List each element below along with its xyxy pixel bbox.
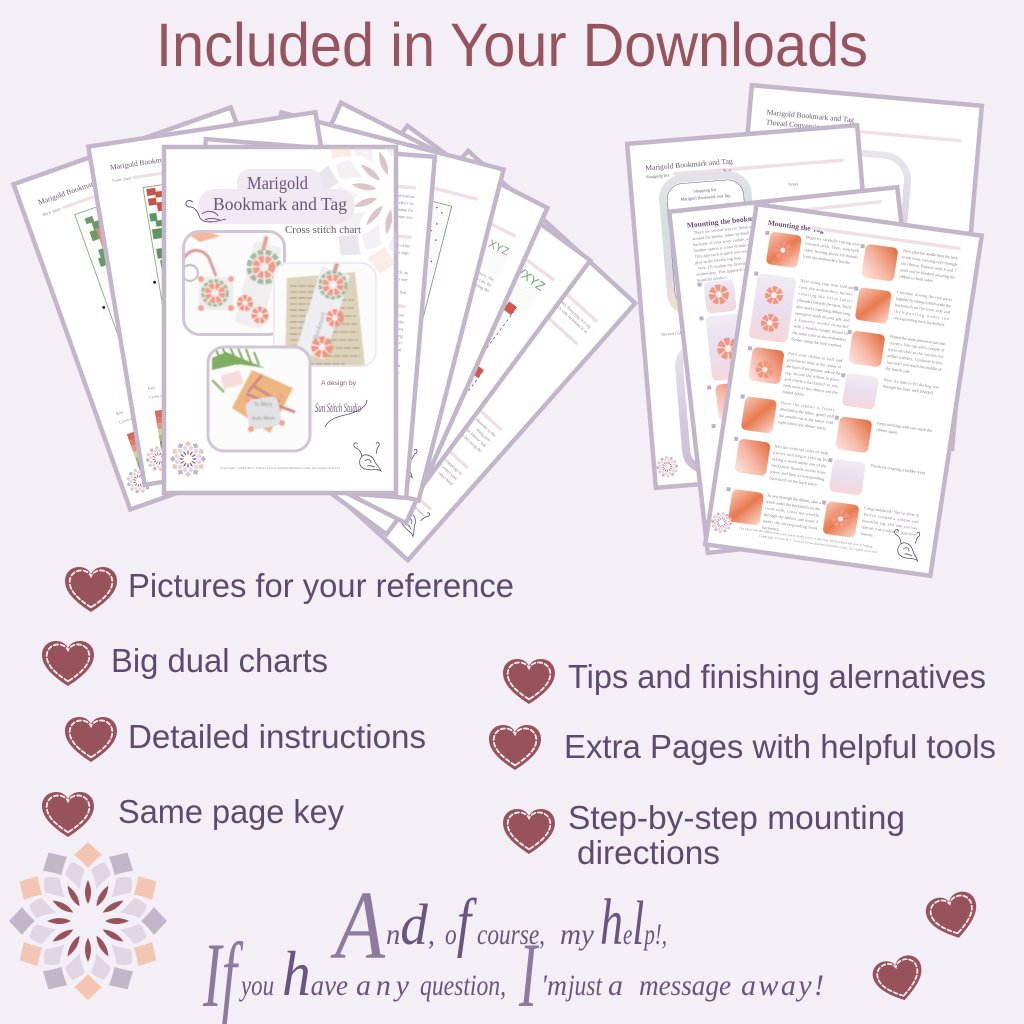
list item: extra pages <box>489 725 996 770</box>
tag page left column text: the same color as the embroidery <box>792 330 848 342</box>
closing script message: have <box>282 938 348 1009</box>
page: cover <box>162 144 398 496</box>
page: alphabet chart two: letters can, the <box>468 272 493 289</box>
list item: detailed instructions: Detailed instructions <box>128 718 426 755</box>
closing script message: 'm <box>541 969 567 1002</box>
tag page right column text <box>860 248 959 544</box>
photo: gift tag on box: from Mom <box>252 416 274 422</box>
page: introduction text: the <box>398 319 404 325</box>
closing script message: course, <box>477 918 545 951</box>
page: introduction text: over one <box>392 276 408 282</box>
closing script message: any <box>356 969 410 1002</box>
page: shopping list: Marigold Bookmark and Tag <box>645 156 733 172</box>
tag page left column text: tuck the embroidery border, <box>799 284 854 298</box>
cover mandala <box>170 441 206 477</box>
cover title plaque <box>198 169 355 224</box>
closing script message: my <box>560 918 595 951</box>
page: front chart: Front chart <box>112 175 132 183</box>
page: finishing notes (rearmost): hope this pattern's only limitation is to <box>537 287 589 334</box>
tag page left column text: tag. Secure the ribbon in place <box>785 370 840 382</box>
photo: tag and bookmark <box>182 230 286 336</box>
closing script message: away! <box>741 969 824 1002</box>
page: alphabet chart <box>204 126 590 534</box>
page: shopping list: Marigold Bookmark and Tag <box>680 193 731 202</box>
page: alphabet chart: UWXYZ <box>502 255 548 294</box>
page: thread conversion: Thread Conversion <box>765 118 824 132</box>
tag page right column text: You've created a unique and <box>863 512 920 524</box>
page: back chart: Marigold Bookmark <box>37 178 98 207</box>
page: alphabet chart two <box>200 103 547 523</box>
page: shopping list: Notes <box>788 181 799 187</box>
photo: bookmark on book: Bookmark <box>311 310 328 341</box>
tag page left column text: Next, using your iron, fold and <box>800 278 856 291</box>
page: alphabet chart two: using the <box>474 282 490 293</box>
page: back chart <box>14 108 347 509</box>
page: finishing notes (rearmost): on the interior side <box>461 423 488 448</box>
page: shopping list: Shopping list <box>646 173 670 179</box>
closing script message: help!, <box>600 886 667 959</box>
tag page left column text: Fold your ribbon in half and <box>788 351 844 363</box>
page: front chart: Cross stitch <box>149 392 171 400</box>
tag page left column text: and create a backstitch to join <box>784 376 840 389</box>
page: mounting the bookmark: Neither option is a true double-sided <box>693 241 757 253</box>
page: mounting the bookmark <box>669 187 936 553</box>
list item: same page key <box>42 792 344 837</box>
tag page left column text: pieces and begin sewing by <box>773 450 829 462</box>
page: alphabet chart two: the pattern. The <box>469 265 495 282</box>
tag page left column text: sides, leaving about 3/8 threads <box>803 247 859 261</box>
page: front chart: Key <box>147 385 156 391</box>
tag page left column text: front side, cross the needle <box>764 505 819 519</box>
list item: step-by-step mounting directions <box>503 799 905 871</box>
tag page left column text: from the embroidery border. <box>803 254 851 265</box>
tag page left column text: To sew through the ribbon, take a <box>766 493 821 506</box>
page: introduction text: your chosen name for <box>376 205 414 213</box>
page: finishing notes (rearmost) <box>241 151 635 560</box>
photo: gift tag on box <box>207 346 311 452</box>
list item: same page key: Same page key <box>118 793 344 830</box>
tag page right column text: the fourth side. <box>885 366 911 374</box>
page: finishing notes (rearmost): other hand <box>438 470 455 487</box>
cover bird doodle <box>354 442 381 471</box>
page: introduction text: I hope you <box>394 213 414 220</box>
tag page left column text: also need a matching ribbon long <box>796 304 852 316</box>
page: mounting the bookmark: Mounting the bookmark <box>686 212 766 230</box>
tag page step photos <box>717 229 899 539</box>
closing script message <box>202 872 824 1024</box>
page: introduction text: thick, as <box>393 269 409 276</box>
page: shopping list: Record Colors <box>661 330 687 337</box>
tag page right column text: added stability. Continue in this <box>887 353 943 366</box>
tag page left column text: (threads) towards the back. You'll <box>797 297 853 310</box>
tag page right column text: backstitch on the front side and <box>895 302 951 315</box>
tag page left column text: border using the loop method. <box>791 336 843 348</box>
page: mounting the bookmark: glue in the interfacing step <box>695 255 741 265</box>
list item: extra pages: Extra Pages with helpful tools <box>564 728 996 765</box>
tag page right column text: together by taking a stitch under the <box>896 296 952 308</box>
page: thread conversion: Marigold Bookmark and Tag <box>766 108 855 124</box>
closing script message: message <box>639 969 731 1002</box>
tag page left column text: finished work. Then, trim both <box>804 241 860 254</box>
cover title text: Bookmark and Tag <box>213 194 347 214</box>
tag page right column text: to the front, carrying only through <box>902 254 959 268</box>
tag page right column text: corners. You can add a couple of <box>889 340 945 353</box>
cover title text: Marigold <box>247 173 308 193</box>
cover designer credit: Sun Stitch Studio <box>315 400 361 415</box>
tag page footer: Copyright ©2024 M.L. Tonino (www.SunStitchStudio.com). All rights reserved <box>758 533 878 554</box>
tag page left column text: folded fabric. <box>782 389 806 397</box>
tag page right column text: the ribbon. Repeat steps 6 and 7 <box>901 261 958 273</box>
tag page left column text: position its ends at the center of <box>787 357 842 370</box>
page: back chart: Back chart <box>42 206 62 217</box>
list item: big dual charts: Big dual charts <box>111 642 328 679</box>
tag page left column text: attached to the fabric, gently pull <box>779 406 835 420</box>
title: Included in Your Downloads <box>156 11 868 79</box>
page: mounting the bookmark: around the border, either by hand or machine <box>692 228 770 242</box>
tag page left column text: with a double-length thread in <box>793 323 849 336</box>
page: introduction text: any hair <box>392 289 407 295</box>
list item: pictures for your reference: Pictures for your reference <box>128 567 514 604</box>
page: introduction text: ver <box>396 340 403 345</box>
page: mounting the bookmark: backside of your work visible, which <box>693 235 758 248</box>
tag page right column text: Now, it's time to fill the bag you <box>883 377 940 391</box>
tag page left column text: enough to stash on your gift, and <box>795 310 851 324</box>
tag page left column text: backstitch on the back piece. <box>769 475 818 487</box>
tag page left column text: Join the external sides of both <box>774 443 830 456</box>
cover copyright: Copyright ©2024 M.L. Tonino (www.SunStitchStudio.com). All rights reserved <box>220 465 340 470</box>
photo: bookmark on book <box>273 262 377 367</box>
tag page left column text: both ends of the ribbon and the <box>783 383 838 395</box>
page: finishing notes (rearmost): the wrappings to <box>439 453 463 476</box>
page: introduction text: wire <box>397 312 405 318</box>
page: shopping list <box>627 125 886 488</box>
page: introduction text: sure <box>392 369 400 375</box>
list item: step-by-step mounting directions: Step-by-step mounting <box>568 799 905 836</box>
tag page left column text: taking a stitch under one of the <box>772 456 827 469</box>
page: finishing notes (rearmost): using pins. <box>475 427 492 443</box>
tag page left column text: through the ribbon, and insert it <box>763 512 819 525</box>
tag page left column text: the needle out at the fabric fold <box>779 413 834 425</box>
closing script message: I <box>518 924 540 1024</box>
tag page right column text: until you've finished securing the <box>900 267 956 280</box>
decorative heart lower <box>870 952 929 1006</box>
tag page bird doodle <box>891 529 922 561</box>
page: mounting the bookmark: Now, I'll explain my favorite <box>697 260 747 272</box>
page: introduction text: ling <box>396 333 404 338</box>
closing script message: question, <box>420 969 506 1002</box>
tag page right column text: Now, pass the needle from the back <box>903 248 959 262</box>
page: finishing notes (rearmost): stitches using the <box>458 430 483 454</box>
tag page left column text: backstitch. <box>762 525 781 532</box>
page: finishing notes (rearmost): directions <box>411 503 427 518</box>
tag page right column text: extra stitches in the corners for <box>888 346 944 359</box>
list item: tips and finishing alternatives <box>503 658 986 704</box>
cover doodle curl <box>186 200 226 222</box>
page: large chart <box>196 112 504 501</box>
page: introduction text: stitch of the <box>390 242 411 248</box>
list item: detailed instructions <box>65 717 426 762</box>
page: introduction text <box>177 139 435 498</box>
cover title text: Cross stitch chart <box>285 224 361 236</box>
fan of chart pages <box>14 96 635 560</box>
closing script message: you <box>239 969 274 1002</box>
list item: tips and finishing alternatives: Tips and finishing alernatives <box>568 658 986 695</box>
list item: step-by-step mounting directions: directions <box>577 834 720 871</box>
closing script message: of <box>445 886 477 959</box>
cover designer credit: A design by <box>321 380 357 387</box>
page: finishing notes (rearmost): that covers your <box>435 459 459 481</box>
tag page left column text: piece, and then a corresponding <box>770 469 826 483</box>
tag page right column text: Congratulations! You've done it! <box>864 505 920 518</box>
page: back chart: Key <box>115 409 125 416</box>
list item: big dual charts <box>42 641 328 686</box>
page: alphabet chart two: XYZ <box>487 238 511 259</box>
tag page right column text: Keep stitching until you reach the <box>877 420 933 433</box>
tag page right column text: way until you reach the middle of <box>886 359 942 372</box>
tag page left column text: backstitch threads on the front <box>771 462 827 475</box>
page: front chart: Marigold Bookmark <box>109 154 172 172</box>
page: introduction text: ral <box>397 347 403 352</box>
page: finishing notes (rearmost): are beautiful in every flowering. It is my <box>538 280 593 330</box>
tag page mandala <box>709 510 734 535</box>
photo: gift tag on box: To Mio's <box>254 402 273 408</box>
page: mounting the bookmark: This approach is quick and results <box>694 248 753 259</box>
tag page right column text: then passing under the <box>894 309 950 321</box>
page: back chart: Cross stitch <box>118 413 140 425</box>
page: introduction text: with a beautiful effect by <box>371 198 415 206</box>
tag page left column text: a Tapestry needle threaded <box>794 317 850 329</box>
page: mounting the bookmark: There are several ways to finish a bookmark, <box>693 222 771 236</box>
tag page right column text: ribbon to both sides. <box>899 274 934 283</box>
tag page left column text: stitch under the backstitch on the <box>766 499 820 511</box>
page: finishing notes (rearmost): attach the elements to the <box>462 405 497 438</box>
tag page right column text: ribbon again. <box>876 427 899 435</box>
tag page left column text: creasing the extra fabric <box>798 291 853 303</box>
tag page left column text: Once the ribbon is firmly <box>781 400 836 413</box>
page: introduction text: first <box>396 326 404 332</box>
tag page right column text: beautiful tag. The one you can <box>862 518 919 531</box>
flower mandala logo <box>9 842 167 1000</box>
tag page right column text: Repeat the same process to turn the <box>890 334 946 346</box>
cover faded mandala <box>318 147 396 274</box>
cover title text <box>213 173 361 236</box>
page: introduction text: of cross stitch definitions <box>371 191 415 199</box>
page: mounting the bookmark: embroidery. This approach is <box>696 266 747 277</box>
closing script message: a <box>608 969 623 1002</box>
page: introduction text: such as a sign. <box>385 248 410 255</box>
page: shopping list: Shopping list <box>693 187 717 194</box>
tag page right column text: Continue sewing the two parts <box>897 289 953 302</box>
tag page left column text: the back of the primary side of the <box>786 363 841 376</box>
fan of extras and mounting pages <box>627 85 982 576</box>
tag page left column text: under the corresponding front <box>763 518 818 531</box>
closing script message: just <box>565 969 603 1002</box>
page: front chart <box>88 112 372 485</box>
page: thread conversion <box>722 85 982 449</box>
tag page footer: Tip: Don't use the ribbon loop until you're ready to use it, this way you'll reduce the risk of fraying <box>738 526 873 550</box>
tag page right column text: cherish it as a token of your love <box>861 524 917 537</box>
page: mounting the bookmark: beautiful product. <box>697 275 728 283</box>
decorative heart upper <box>923 889 983 944</box>
tag page right column text: Finish by creating a hidden knot. <box>870 463 927 475</box>
tag page right column text: forever. <box>860 531 874 538</box>
page: mounting the tag <box>705 204 982 576</box>
closing script message: A <box>330 872 386 980</box>
tag page right column text: corresponding back backstitch. <box>893 315 946 327</box>
closing script message: If <box>202 924 244 1024</box>
tag page left column text <box>762 234 862 537</box>
tag page left column text: Begin by carefully cutting your <box>806 234 861 247</box>
cover designer credit <box>315 380 367 427</box>
tag page right column text: through the hole with fiberfill. <box>882 383 934 396</box>
tag page heading: Mounting the Tag <box>767 218 825 235</box>
tag page left column text: right where the ribbon starts. <box>778 419 827 431</box>
closing script message: nd, <box>386 892 435 957</box>
page: introduction text: with <box>392 363 401 368</box>
